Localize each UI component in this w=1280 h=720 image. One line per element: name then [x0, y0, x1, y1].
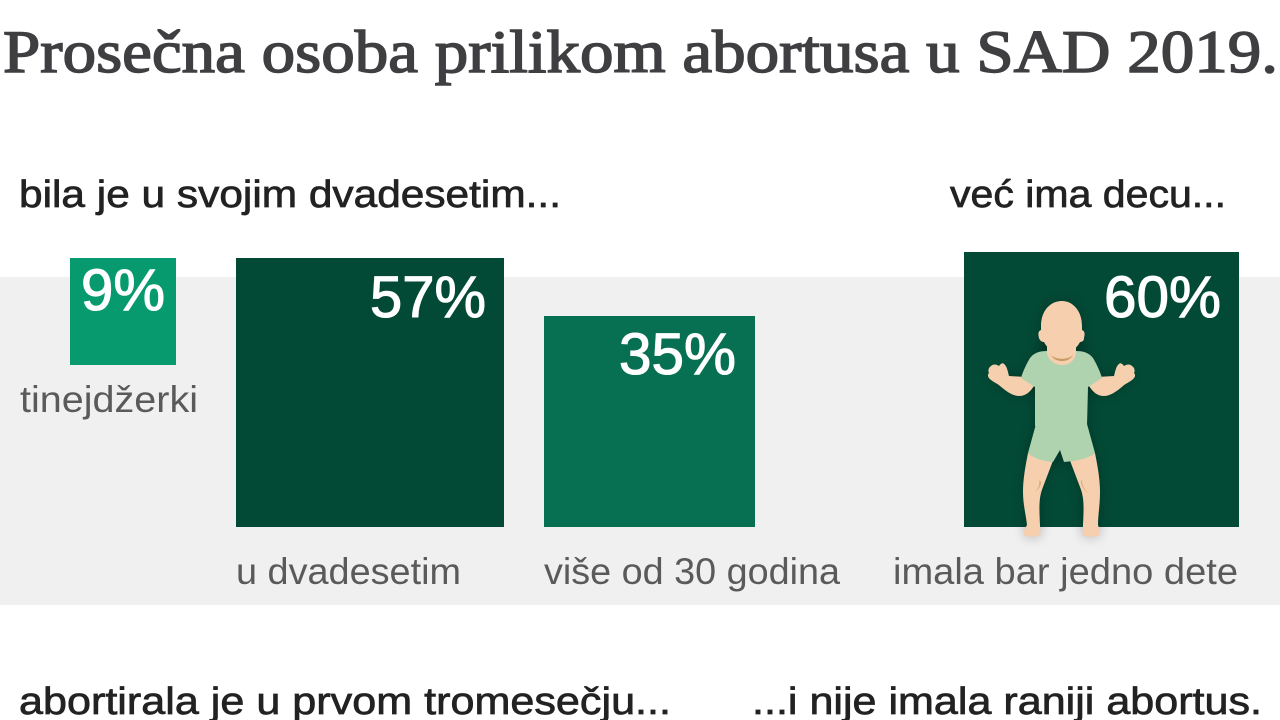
heading: age: bila je u svojim dvadesetim...: [19, 174, 561, 216]
baby: shorts: [1028, 424, 1095, 462]
label: has children: imala bar jedno dete: [893, 551, 1238, 592]
baby: right leg: [1069, 453, 1100, 536]
baby: head: [1038, 301, 1085, 354]
label: over 30: više od 30 godina: [544, 551, 840, 592]
panel: grey chart band: [0, 277, 1280, 605]
label: teenagers: tinejdžerki: [20, 379, 198, 420]
icon: baby: [988, 301, 1135, 537]
baby: shirt: [1021, 351, 1102, 426]
baby: right arm: [1089, 363, 1135, 396]
bar: over 30 35%: [544, 316, 755, 527]
bar: has children 60%: 60%: [1104, 265, 1221, 330]
baby: neck shadow: [1051, 355, 1073, 361]
bar: twenties 57%: [236, 258, 504, 527]
heading: children: već ima decu...: [950, 174, 1226, 216]
baby: neck: [1047, 345, 1076, 365]
label: twenties: u dvadesetim: [236, 551, 461, 592]
bar: has children 60%: [964, 252, 1239, 527]
baby: left arm: [988, 363, 1034, 396]
bar: over 30 35%: 35%: [619, 322, 736, 387]
bar: teenagers 9%: [70, 258, 176, 365]
baby: left knee crease: [1035, 480, 1041, 492]
title: Prosečna osoba prilikom abortusa u SAD 2019.: [3, 19, 1278, 85]
baby: right knee crease: [1081, 480, 1088, 493]
baby: left leg: [1023, 453, 1054, 536]
bar: twenties 57%: 57%: [370, 265, 486, 330]
bar: teenagers 9%: 9%: [81, 258, 165, 323]
